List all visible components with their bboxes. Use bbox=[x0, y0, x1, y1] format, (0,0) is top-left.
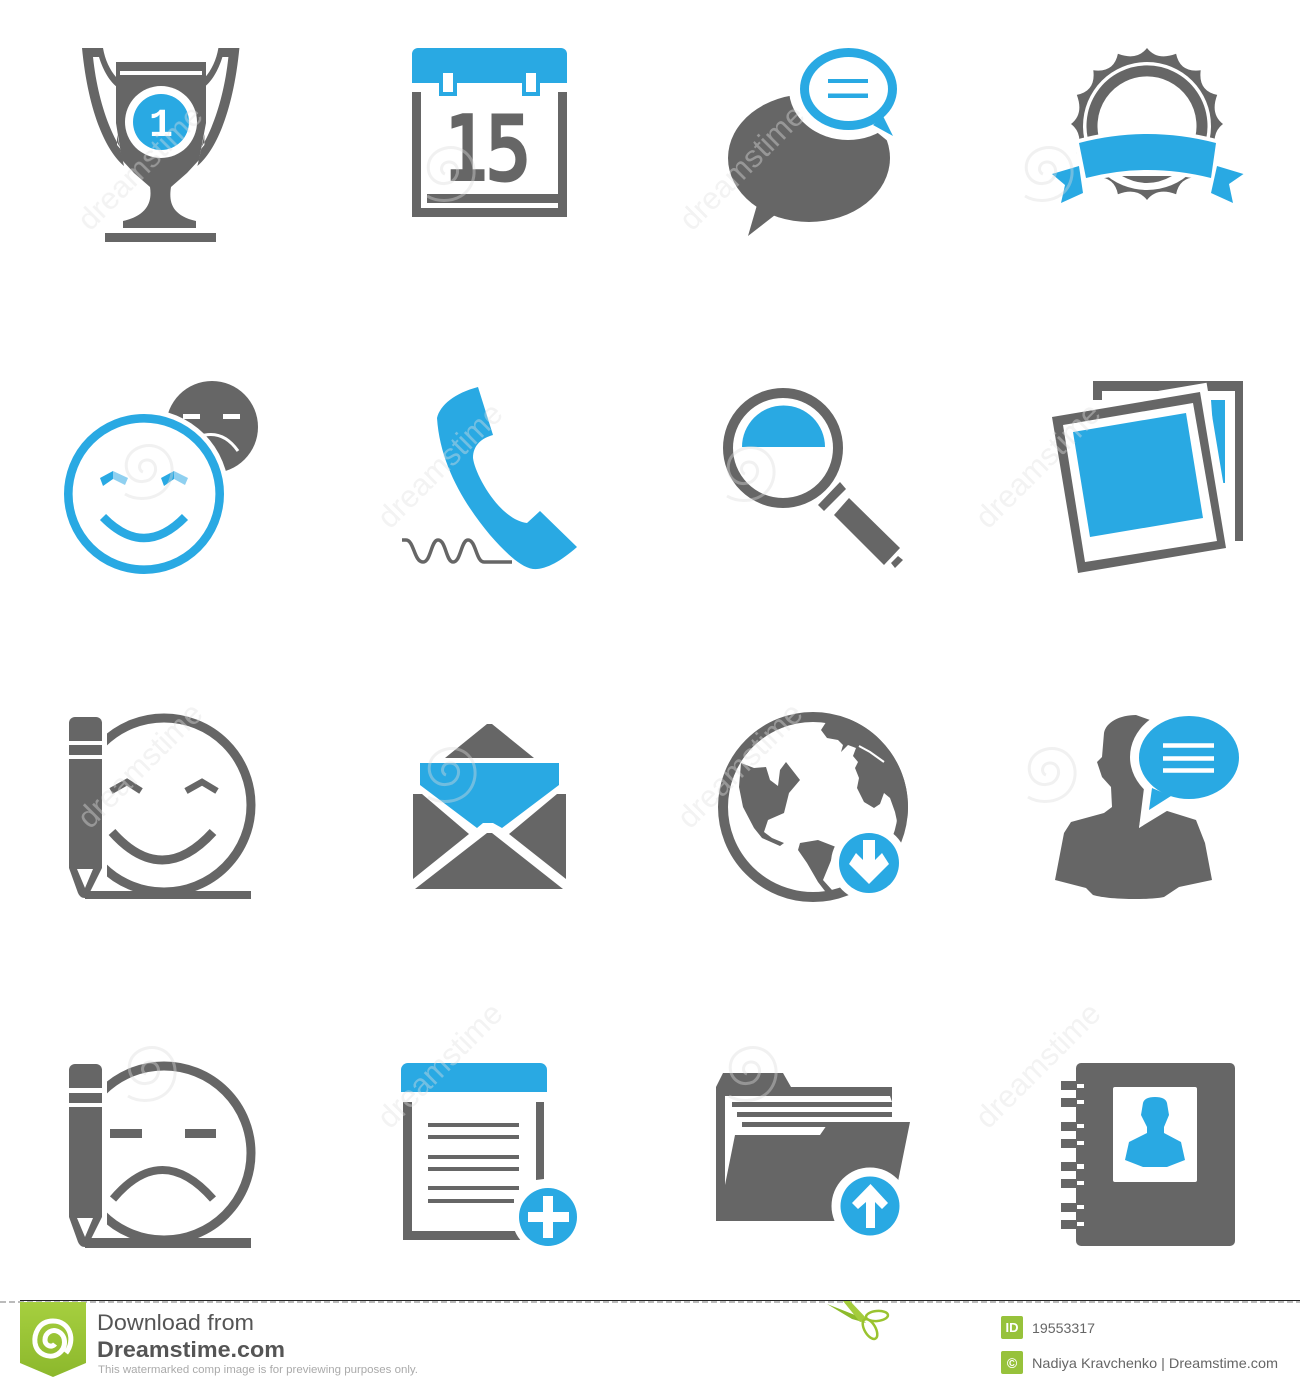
watermark: faint spirals and text: dreamstime bbox=[672, 98, 811, 237]
footer author credit: Nadiya Kravchenko | Dreamstime.com bbox=[1032, 1355, 1278, 1371]
icon: badge with ribbon bbox=[1052, 48, 1244, 203]
icon: pencil with sad face bbox=[60, 1055, 251, 1248]
icon: calendar: 1 bbox=[444, 95, 488, 203]
watermark: faint spirals and text bbox=[70, 98, 1107, 1135]
watermark: faint spirals and text: dreamstime bbox=[70, 696, 209, 835]
footer download text: Dreamstime.com bbox=[97, 1337, 285, 1362]
watermark: faint spirals and text: dreamstime bbox=[70, 98, 209, 237]
icon: scissors bbox=[827, 1301, 888, 1341]
watermark: faint spirals and text: dreamstime bbox=[968, 396, 1107, 535]
icon: notes with plus bbox=[401, 1063, 584, 1253]
icon: calendar bbox=[412, 48, 567, 217]
icon: trophy bbox=[82, 48, 239, 242]
icon: calendar: 5 bbox=[484, 95, 532, 203]
watermark: faint spirals and text: dreamstime bbox=[670, 696, 809, 835]
icon: telephone bbox=[402, 387, 577, 569]
watermark: faint spirals and text: dreamstime bbox=[370, 396, 509, 535]
footer author credit bbox=[1001, 1351, 1278, 1374]
icon: person with speech bubble bbox=[1055, 707, 1248, 899]
footer image id: 19553317 bbox=[1032, 1320, 1095, 1336]
icon: open envelope bbox=[413, 724, 566, 889]
icon: trophy: 1 bbox=[149, 104, 173, 149]
footer author credit: © bbox=[1007, 1355, 1018, 1371]
footer image id bbox=[1001, 1316, 1095, 1339]
footer image id: ID bbox=[1006, 1320, 1018, 1335]
icon: speech bubbles bbox=[728, 38, 907, 236]
icon: address book bbox=[1061, 1063, 1235, 1246]
footer download text bbox=[97, 1310, 418, 1376]
footer download text: Download from bbox=[97, 1310, 254, 1335]
watermark: faint spirals and text: dreamstime bbox=[968, 996, 1107, 1135]
footer divider bbox=[0, 1300, 1300, 1302]
icon: photos bbox=[1052, 381, 1243, 573]
icon: magnifying glass bbox=[728, 393, 903, 568]
icon: pencil with smiling face bbox=[60, 705, 251, 899]
icon: smiley with sad face bbox=[59, 381, 258, 579]
icon: globe with download bbox=[723, 716, 912, 901]
watermark: faint spirals and text: dreamstime bbox=[370, 996, 509, 1135]
footer download text: This watermarked comp image is for previewing purposes only. bbox=[98, 1364, 418, 1376]
icon: folder with upload bbox=[716, 1073, 910, 1244]
footer ribbon logo bbox=[20, 1302, 86, 1377]
